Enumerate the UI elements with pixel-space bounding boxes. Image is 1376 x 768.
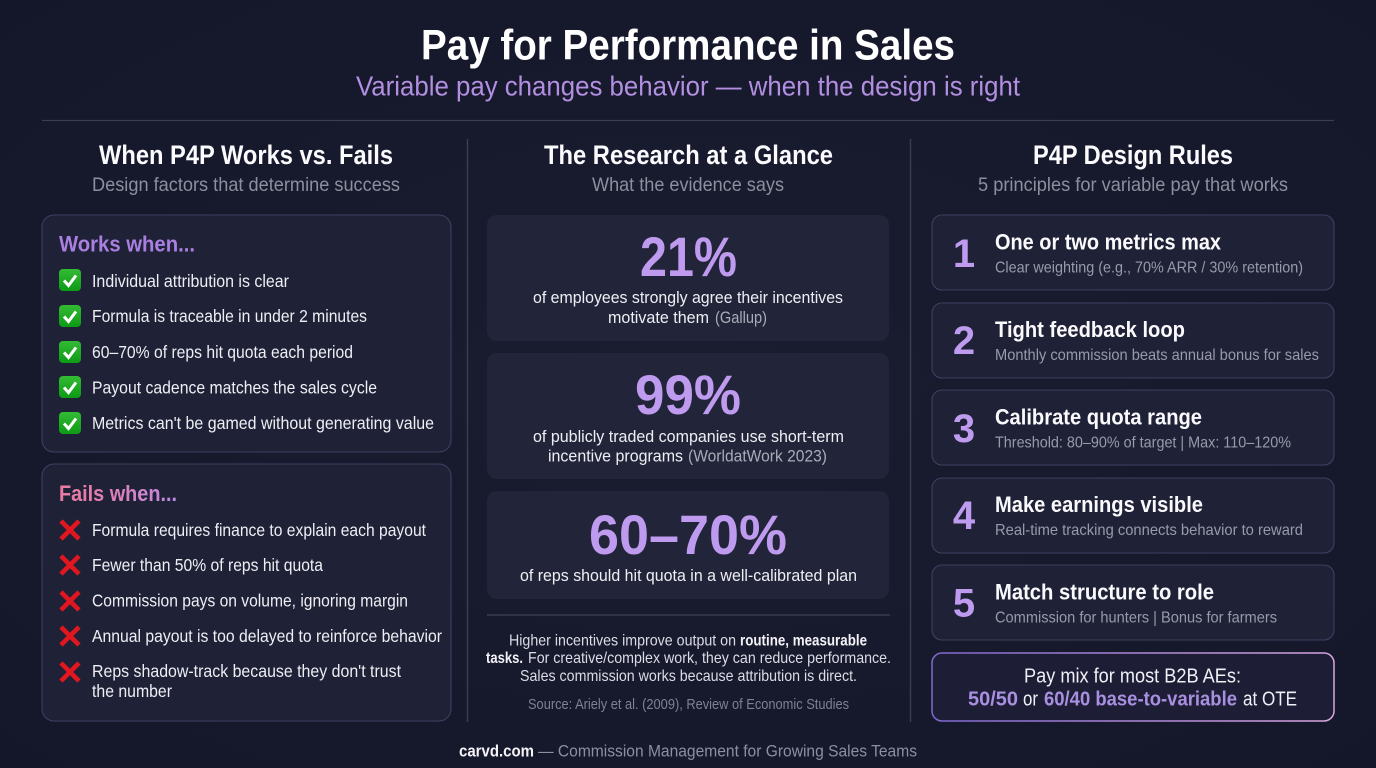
callout: pay mix: or [1023, 688, 1038, 710]
rule 3 detail: Threshold: 80–90% of target | Max: 110–120% [995, 434, 1291, 452]
icon: green check 3 [59, 341, 81, 363]
fails item 2: Fewer than 50% of reps hit quota [92, 555, 323, 575]
rule 5 title: Match structure to role [995, 580, 1214, 604]
rule 4 title: Make earnings visible [995, 492, 1203, 517]
research note paragraph: Higher incentives improve output on [509, 632, 736, 650]
callout: pay mix: at OTE [1243, 688, 1297, 710]
fails item 4: Annual payout is too delayed to reinforce behavior [92, 626, 442, 646]
works item 1: Individual attribution is clear [92, 271, 289, 291]
callout: pay mix: Pay mix for most B2B AEs: [1024, 666, 1241, 688]
fails item 5: Reps shadow-track because they don't trust [92, 661, 401, 681]
panel: fails when [42, 464, 451, 721]
title: Pay for Performance in Sales [421, 22, 955, 70]
middle column subheading: What the evidence says [592, 174, 784, 196]
fails item 3: Commission pays on volume, ignoring margin [92, 590, 408, 610]
rule 2 detail: Monthly commission beats annual bonus for sales [995, 347, 1319, 364]
fails item 1: Formula requires finance to explain each payout [92, 520, 426, 540]
research note paragraph: routine, measurable [740, 632, 867, 650]
left column: when P4P works vs fails [42, 140, 451, 721]
stat description 21%: (Gallup) [715, 308, 767, 327]
right column heading: P4P Design Rules [1033, 140, 1233, 170]
stat card: 60–70% [487, 491, 889, 599]
rule number 2: 2 [953, 319, 975, 363]
rule 5 detail: Commission for hunters | Bonus for farmers [995, 610, 1277, 626]
icon: red cross 3 [61, 592, 79, 610]
stat description 21%: motivate them [608, 308, 709, 327]
rule number 4: 4 [953, 494, 976, 538]
icon: green check 2 [59, 305, 81, 327]
callout: pay mix: 50/50 [968, 688, 1018, 710]
stat description 21%: of employees strongly agree their incentives [533, 288, 843, 307]
rule number 3: 3 [953, 407, 975, 451]
works when heading: Works when... [59, 232, 195, 256]
icon: red cross 5 [61, 663, 79, 681]
rule 1 detail: Clear weighting (e.g., 70% ARR / 30% retention) [995, 260, 1303, 276]
stat description 99%: incentive programs [548, 446, 683, 466]
middle column: the research at a glance [486, 140, 891, 713]
left column heading: When P4P Works vs. Fails [99, 140, 393, 170]
fails item 5: the number [92, 681, 172, 701]
icon: red cross 4 [61, 627, 79, 645]
icon: green check 5 [59, 412, 81, 434]
works item 5: Metrics can't be gamed without generating value [92, 413, 434, 433]
rule number 5: 5 [953, 582, 975, 626]
rule 3 title: Calibrate quota range [995, 404, 1202, 430]
rule 5 [932, 565, 1334, 640]
research note paragraph: For creative/complex work, they can reduce performance. [528, 650, 891, 667]
fails when heading: Fails when... [59, 481, 177, 506]
footer: carvd.com [459, 742, 534, 760]
works item 4: Payout cadence matches the sales cycle [92, 378, 377, 398]
rule 1 title: One or two metrics max [995, 230, 1221, 254]
stat description 99%: of publicly traded companies use short-term [533, 427, 844, 446]
rule 4 detail: Real-time tracking connects behavior to reward [995, 522, 1303, 539]
stat description 99% [533, 427, 844, 466]
stat number 99%: 99% [635, 363, 741, 426]
stat card: 21% [487, 215, 889, 341]
stat description 60–70%: of reps should hit quota in a well-calibrated plan [520, 566, 857, 585]
callout: pay mix: 60/40 base-to-variable [1044, 688, 1237, 710]
rule 4 [932, 478, 1334, 553]
rule 2 [932, 303, 1334, 378]
rule number 1: 1 [953, 232, 975, 276]
footer: — Commission Management for Growing Sales Teams [538, 742, 917, 760]
stat number 60–70%: 60–70% [589, 503, 787, 566]
research note paragraph [486, 632, 891, 685]
panel: works when [42, 215, 451, 452]
subtitle: Variable pay changes behavior — when the design is right [356, 70, 1020, 102]
research note paragraph: Sales commission works because attribution is direct. [520, 668, 857, 685]
rule 3 [932, 390, 1334, 465]
left column subheading: Design factors that determine success [92, 174, 400, 196]
icon: green check 1 [59, 269, 81, 291]
right column subheading: 5 principles for variable pay that works [978, 174, 1288, 196]
rule 1 [932, 215, 1334, 290]
stat number 21%: 21% [640, 225, 737, 288]
works item 3: 60–70% of reps hit quota each period [92, 342, 353, 362]
callout: pay mix [932, 653, 1334, 721]
middle column heading: The Research at a Glance [544, 140, 833, 170]
fails item 5 [92, 661, 401, 701]
icon: green check 4 [59, 376, 81, 398]
rule 2 title: Tight feedback loop [995, 317, 1185, 342]
stat description 99%: (WorldatWork 2023) [688, 446, 827, 466]
source citation: Source: Ariely et al. (2009), Review of Economic Studies [528, 697, 849, 713]
research note paragraph: tasks. [486, 650, 523, 667]
stat description 21% [533, 288, 843, 327]
stat card: 99% [487, 353, 889, 479]
right column: P4P design rules [932, 140, 1334, 721]
icon: red cross 1 [61, 521, 79, 539]
works item 2: Formula is traceable in under 2 minutes [92, 306, 367, 326]
icon: red cross 2 [61, 556, 79, 574]
